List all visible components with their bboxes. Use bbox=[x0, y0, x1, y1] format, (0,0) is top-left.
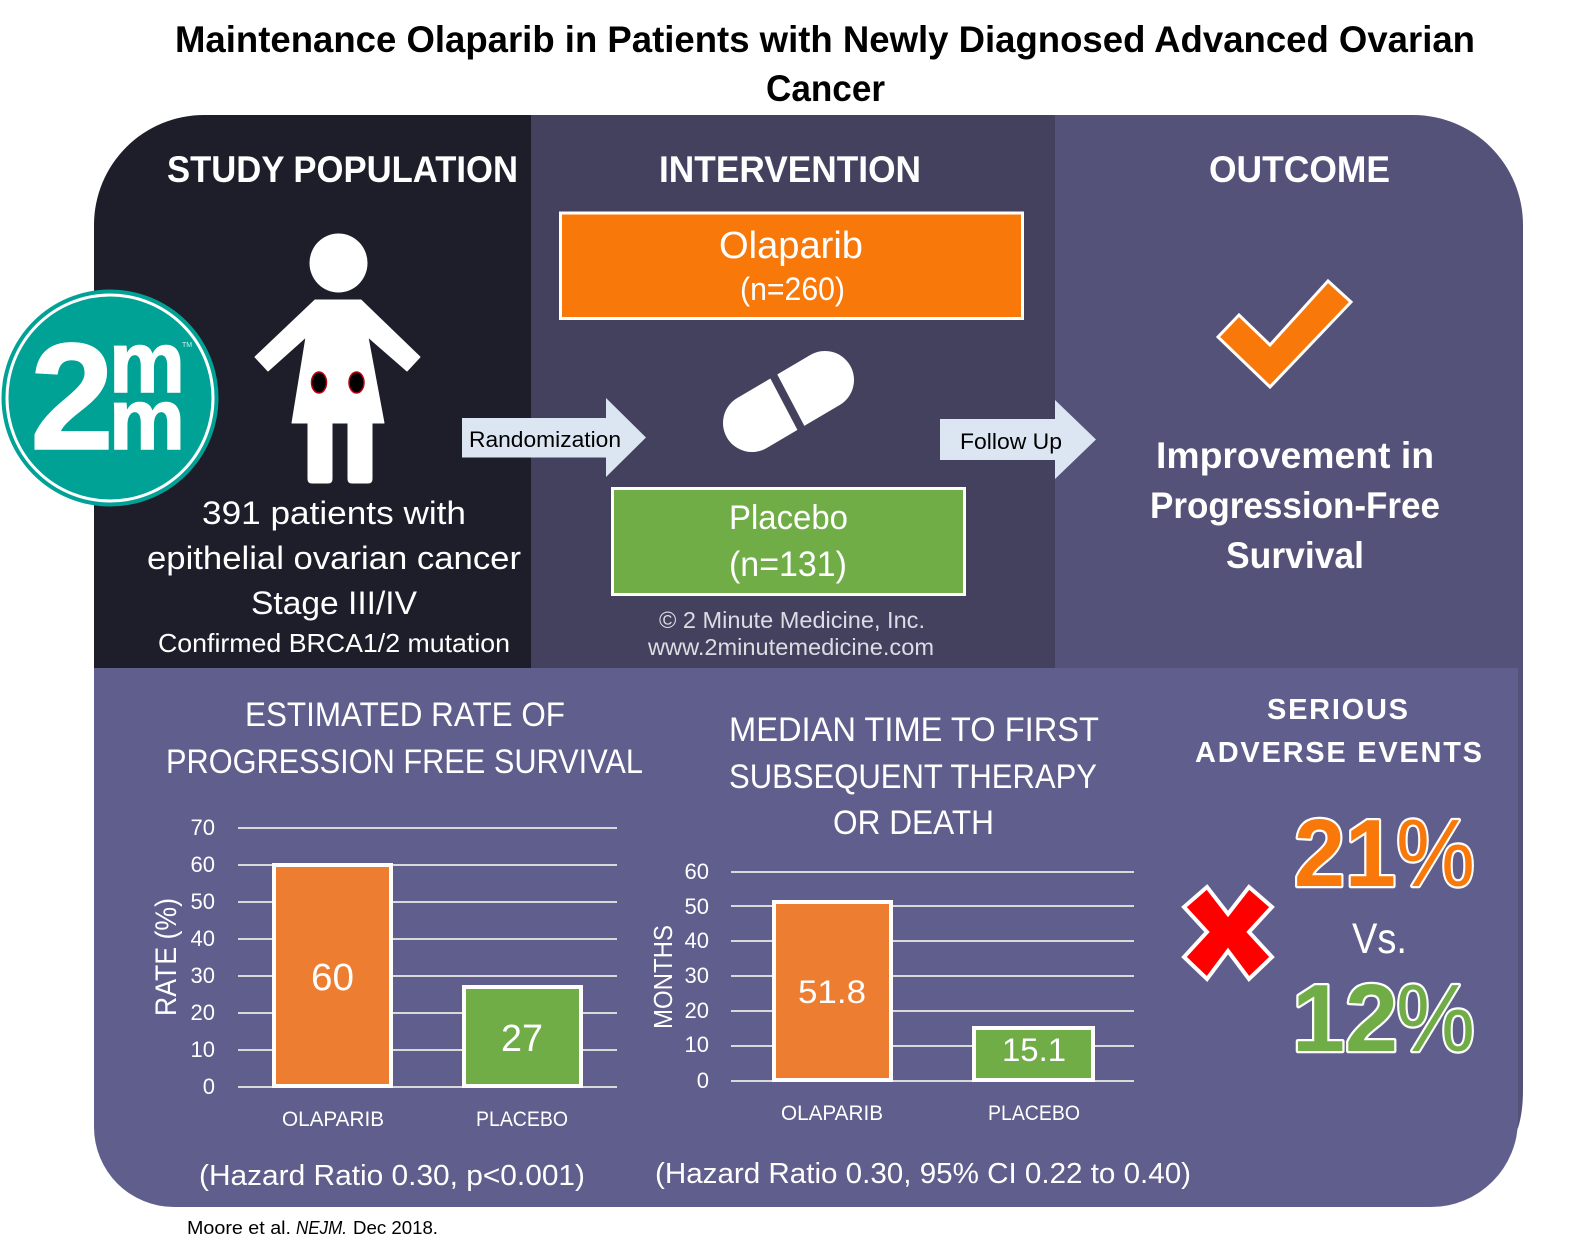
category labels: PLACEBO bbox=[988, 1102, 1080, 1125]
text: outcome result bbox=[1150, 435, 1440, 576]
box: olaparib arm bbox=[560, 213, 1022, 318]
citation: Moore et al. bbox=[187, 1217, 291, 1238]
logo: 2 minute medicine: m bbox=[109, 372, 185, 468]
panel: study population bbox=[94, 115, 531, 668]
y axis labels: 70 bbox=[191, 815, 215, 840]
panel: results bbox=[94, 668, 1518, 1207]
heading: serious adverse events: SERIOUS bbox=[1267, 694, 1408, 726]
hazard ratio note: (Hazard Ratio 0.30, p<0.001) bbox=[199, 1160, 585, 1192]
panel: outcome bbox=[1055, 115, 1523, 1190]
hazard ratio note: (Hazard Ratio 0.30, 95% CI 0.22 to 0.40) bbox=[655, 1158, 1191, 1190]
bar: placebo 27: 27 bbox=[501, 1018, 543, 1060]
text: versus: Vs. bbox=[1352, 915, 1407, 963]
bar: olaparib 51.8: 51.8 bbox=[798, 974, 866, 1010]
chart heading: ESTIMATED RATE OF bbox=[245, 696, 565, 734]
category labels: PLACEBO bbox=[476, 1108, 568, 1131]
text: copyright: © 2 Minute Medicine, Inc. bbox=[659, 607, 925, 633]
box: placebo arm: Placebo bbox=[729, 499, 848, 537]
bar: olaparib 60 bbox=[274, 865, 391, 1086]
y axis labels: 60 bbox=[685, 859, 709, 884]
y axis labels: 30 bbox=[191, 963, 215, 988]
y axis labels: 10 bbox=[685, 1032, 709, 1057]
category labels: OLAPARIB bbox=[282, 1108, 384, 1131]
box: olaparib arm: (n=260) bbox=[740, 271, 845, 307]
arrow: randomization bbox=[462, 398, 646, 477]
stat: olaparib 21%: 21 bbox=[1294, 800, 1396, 907]
icon: female figure with ovaries bbox=[255, 234, 420, 483]
y axis labels: 50 bbox=[191, 889, 215, 914]
stat: placebo 12%: % bbox=[1396, 965, 1475, 1072]
bar: placebo 15.1 bbox=[974, 1028, 1093, 1080]
y axis labels: 40 bbox=[191, 926, 215, 951]
y axis labels: 50 bbox=[685, 894, 709, 919]
chart: median time to first subsequent therapy or death bbox=[648, 711, 1191, 1190]
y axis labels bbox=[191, 815, 215, 1099]
text: copyright bbox=[647, 607, 934, 660]
box: placebo arm bbox=[612, 488, 964, 594]
logo: 2 minute medicine: m bbox=[109, 315, 185, 411]
chart: estimated rate of progression free survival bbox=[150, 696, 643, 1192]
title bbox=[175, 18, 1475, 109]
logo: 2 minute medicine: TM bbox=[182, 342, 192, 349]
y axis labels: 60 bbox=[191, 852, 215, 877]
chart heading: OR DEATH bbox=[833, 804, 994, 842]
y axis title: RATE (%) bbox=[150, 898, 183, 1016]
y axis labels: 30 bbox=[685, 963, 709, 988]
y axis labels: 40 bbox=[685, 928, 709, 953]
bar: olaparib 60: 60 bbox=[311, 957, 354, 999]
citation bbox=[187, 1217, 438, 1238]
text: population description: 391 patients with bbox=[202, 495, 466, 531]
heading: serious adverse events: ADVERSE EVENTS bbox=[1195, 737, 1482, 769]
panel: intervention bbox=[531, 115, 1055, 668]
heading: study population: STUDY POPULATION bbox=[167, 149, 518, 190]
stat: olaparib 21% bbox=[1294, 800, 1475, 907]
bar: placebo 15.1: 15.1 bbox=[1002, 1032, 1066, 1068]
category labels bbox=[282, 1108, 568, 1131]
chart heading bbox=[729, 711, 1099, 842]
citation: Dec 2018. bbox=[353, 1217, 438, 1238]
stat: olaparib 21%: % bbox=[1396, 800, 1475, 907]
text: outcome result: Survival bbox=[1226, 535, 1364, 576]
y axis labels: 20 bbox=[191, 1000, 215, 1025]
icon: pill bbox=[752, 373, 825, 430]
text: outcome result: Progression-Free bbox=[1150, 485, 1440, 526]
section: serious adverse events bbox=[1184, 694, 1482, 1072]
arrow: randomization: Randomization bbox=[469, 427, 621, 452]
chart heading: PROGRESSION FREE SURVIVAL bbox=[166, 743, 643, 781]
heading: intervention: INTERVENTION bbox=[659, 149, 921, 190]
y axis labels: 0 bbox=[203, 1074, 215, 1099]
icon: check mark bbox=[1218, 281, 1351, 387]
heading: outcome: OUTCOME bbox=[1209, 149, 1390, 190]
arrow: follow up: Follow Up bbox=[960, 429, 1062, 454]
citation: NEJM. bbox=[296, 1217, 347, 1238]
text: population description: Confirmed BRCA1/2 mutation bbox=[158, 628, 510, 658]
stat: placebo 12%: 12 bbox=[1292, 965, 1398, 1072]
y axis labels: 0 bbox=[697, 1068, 709, 1093]
y axis labels: 20 bbox=[685, 998, 709, 1023]
chart heading: MEDIAN TIME TO FIRST bbox=[729, 711, 1099, 749]
stat: placebo 12% bbox=[1292, 965, 1475, 1072]
title: Cancer bbox=[766, 67, 885, 109]
y axis labels: 10 bbox=[191, 1037, 215, 1062]
text: copyright: www.2minutemedicine.com bbox=[647, 634, 934, 660]
title: Maintenance Olaparib in Patients with Newly Diagnosed Advanced Ovarian bbox=[175, 18, 1475, 60]
logo: 2 minute medicine bbox=[2, 290, 218, 506]
box: olaparib arm: Olaparib bbox=[719, 225, 863, 267]
text: outcome result: Improvement in bbox=[1156, 435, 1434, 476]
bar: olaparib 51.8 bbox=[774, 902, 891, 1080]
arrow: follow up bbox=[940, 400, 1096, 479]
category labels bbox=[781, 1102, 1080, 1125]
box: placebo arm: (n=131) bbox=[729, 545, 847, 584]
bar: placebo 27 bbox=[464, 987, 581, 1086]
heading: serious adverse events bbox=[1195, 694, 1482, 769]
chart heading bbox=[166, 696, 643, 781]
text: population description: epithelial ovarian cancer bbox=[147, 540, 521, 576]
text: population description: Stage III/IV bbox=[251, 585, 418, 621]
icon: red cross bbox=[1184, 887, 1272, 979]
y axis title: MONTHS bbox=[648, 925, 678, 1029]
text: population description bbox=[147, 495, 521, 658]
chart heading: SUBSEQUENT THERAPY bbox=[729, 758, 1097, 796]
logo: 2 minute medicine: 2 bbox=[30, 312, 114, 482]
y axis labels bbox=[685, 859, 709, 1093]
category labels: OLAPARIB bbox=[781, 1102, 883, 1125]
